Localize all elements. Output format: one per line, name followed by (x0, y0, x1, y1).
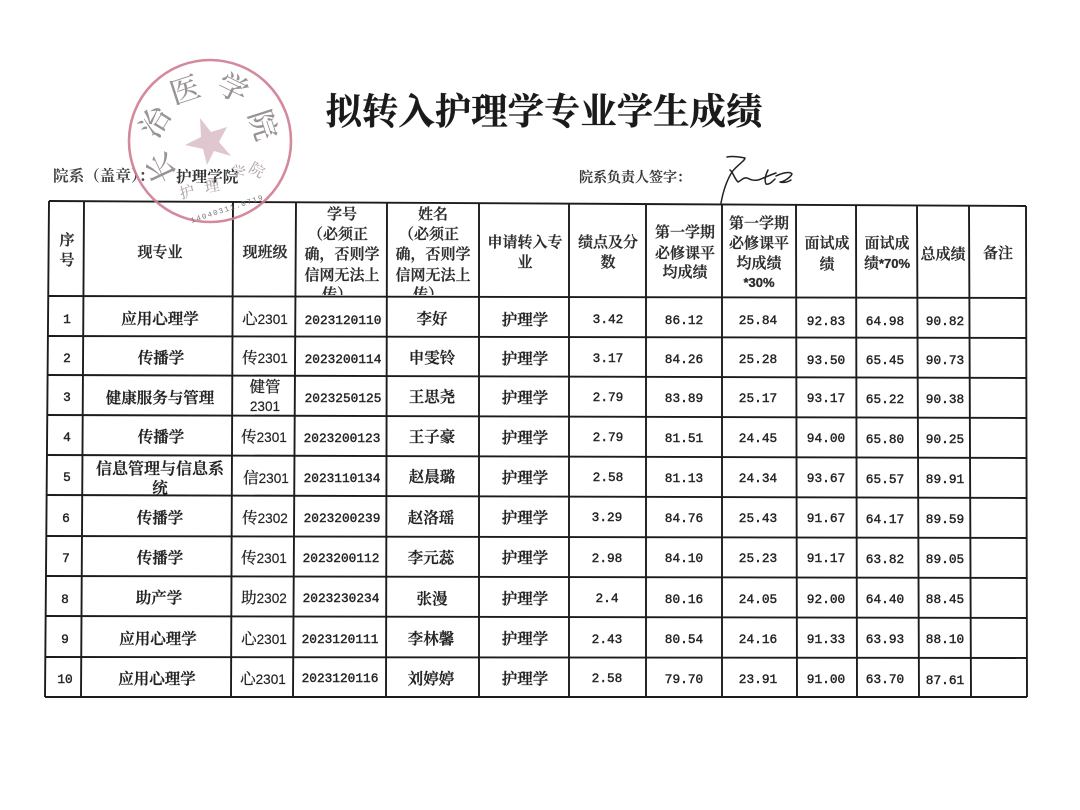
row 5: 89.91 (926, 472, 965, 487)
row 1: 90.82 (926, 314, 964, 329)
row 1: 64.98 (866, 314, 904, 329)
department label: 院系（盖章）： (53, 164, 154, 186)
table header row: 必修课平 (655, 242, 715, 263)
department label (53, 164, 239, 187)
table header row: 绩点及分 (578, 231, 638, 252)
row 3: 王思尧 (409, 385, 455, 407)
row 5: 2023110134 (304, 471, 381, 486)
row 3: 护理学 (502, 386, 549, 408)
table header row: 数 (600, 251, 616, 272)
row 9: 2.43 (592, 632, 622, 647)
row 5: 24.34 (739, 471, 778, 486)
row 9: 91.33 (807, 632, 845, 647)
row 5: 赵晨璐 (409, 465, 456, 487)
row 6: 64.17 (866, 512, 904, 527)
row 8: 92.00 (807, 592, 845, 607)
row 9 (61, 627, 964, 649)
table header row: （必须正 (399, 223, 459, 244)
row 5: 65.57 (866, 472, 904, 487)
row 4: 90.25 (926, 432, 964, 447)
row 10: 护理学 (502, 667, 549, 689)
row 2: 25.28 (739, 352, 777, 367)
row 7: 2.98 (592, 551, 622, 566)
row 4: 94.00 (807, 431, 845, 446)
signer label: 院系负责人签字： (579, 167, 691, 187)
row 5: 5 (63, 470, 71, 485)
row 10 (57, 667, 965, 689)
row 6: 25.43 (739, 511, 777, 526)
row 10: 87.61 (926, 673, 965, 688)
row 3: 65.22 (866, 392, 904, 407)
title: 拟转入护理学专业学生成绩 (326, 83, 763, 135)
table header row: （必须正 (308, 223, 368, 244)
row 9: 9 (61, 632, 69, 647)
row 2: 申雯铃 (409, 346, 456, 368)
row 6: 传播学 (137, 506, 184, 528)
row 7: 传2301 (241, 546, 287, 568)
row 10: 2.58 (592, 671, 622, 686)
row 10: 23.91 (739, 672, 778, 687)
row 1: 李好 (416, 307, 448, 329)
seal department characters (177, 157, 269, 204)
row 5: 护理学 (502, 466, 549, 488)
row 7: 25.23 (739, 551, 777, 566)
table header row: 面试成 (864, 232, 910, 253)
table header row: 绩*70% (864, 252, 910, 273)
row 9: 李林馨 (408, 627, 455, 649)
row 10: 应用心理学 (118, 667, 196, 689)
row 2: 65.45 (866, 353, 904, 368)
row 6: 6 (62, 511, 70, 526)
row 4: 24.45 (739, 431, 777, 446)
row 7: 护理学 (502, 546, 549, 568)
table header row: 均成绩 (662, 261, 708, 282)
row 2: 3.17 (593, 351, 623, 366)
seal ring (129, 60, 291, 222)
row 8 (61, 586, 964, 609)
row 5 (63, 456, 965, 498)
row 1: 1 (63, 312, 71, 327)
row 1 (63, 307, 964, 330)
row 7: 2023200112 (303, 551, 379, 566)
row 8: 24.05 (739, 592, 777, 607)
table grid (45, 201, 1027, 697)
row 9: 24.16 (739, 632, 777, 647)
row 3: 健康服务与管理 (106, 386, 215, 408)
seal department characters: 护 (177, 180, 197, 204)
row 6: 赵洛瑶 (408, 506, 454, 528)
row 3: 2.79 (593, 390, 623, 405)
row 3: 83.89 (665, 391, 703, 406)
handwritten signature (721, 157, 792, 203)
row 4: 2023200123 (304, 431, 380, 446)
row 7: 91.17 (807, 551, 845, 566)
row 8: 8 (61, 592, 69, 607)
row 7: 李元蕊 (408, 546, 456, 568)
table header row: 第一学期 (729, 212, 789, 233)
seal name characters: 院 (240, 103, 291, 145)
table header row: 备注 (983, 242, 1013, 263)
row 10: 63.70 (866, 672, 904, 687)
row 7: 7 (62, 551, 70, 566)
row 5: 信2301 (243, 466, 289, 488)
row 5: 81.13 (665, 471, 703, 486)
row 4: 传播学 (138, 425, 185, 447)
row 2: 传2301 (242, 346, 288, 368)
seal name characters: 医 (163, 62, 205, 113)
row 4: 护理学 (502, 426, 549, 448)
table header row: 号 (59, 249, 75, 270)
row 7 (62, 546, 964, 568)
row 8: 助产学 (136, 586, 183, 608)
row 2 (63, 346, 964, 369)
seal name characters (126, 59, 291, 192)
row 7: 63.82 (866, 552, 904, 567)
row 8: 张漫 (416, 587, 448, 609)
row 1: 25.84 (739, 313, 778, 328)
table header row: 均成绩 (736, 252, 782, 273)
row 2: 84.26 (665, 352, 703, 367)
row 9: 2023120111 (302, 632, 379, 647)
row 4: 4 (63, 430, 71, 445)
row 1: 2023120110 (305, 313, 381, 328)
row 9: 心2301 (241, 627, 287, 649)
row 1: 92.83 (807, 314, 845, 329)
row 4: 81.51 (665, 431, 704, 446)
row 9: 88.10 (926, 632, 964, 647)
row 8: 助2302 (241, 586, 287, 608)
seal name characters: 学 (211, 59, 257, 112)
row 8: 2.4 (595, 591, 619, 606)
row 3: 2023250125 (305, 391, 381, 406)
row 5: 统 (152, 476, 168, 498)
row 1: 86.12 (665, 313, 703, 328)
row 3: 健管 (249, 375, 281, 397)
table header row (60, 206, 1013, 295)
table header row: 绩 (819, 253, 835, 274)
seal name characters: 治 (126, 95, 181, 145)
row 4: 2.79 (593, 430, 623, 445)
table header row: 申请转入专 (487, 231, 563, 252)
row 6: 84.76 (665, 511, 703, 526)
row 3: 25.17 (739, 391, 777, 406)
row 6: 89.59 (926, 512, 964, 527)
row 5: 信息管理与信息系 (96, 456, 224, 479)
table header row: 学号 (327, 203, 357, 224)
table header row: 现专业 (137, 241, 183, 262)
row 8: 2023230234 (303, 591, 380, 606)
row 8: 护理学 (502, 587, 549, 609)
row 10: 刘婷婷 (408, 667, 455, 689)
row 2: 传播学 (138, 346, 185, 368)
row 7: 传播学 (137, 546, 184, 568)
row 2: 2 (63, 351, 71, 366)
row 1: 护理学 (502, 308, 549, 330)
row 7: 89.05 (926, 552, 964, 567)
row 10: 2023120116 (302, 671, 378, 686)
row 2: 90.73 (926, 353, 964, 368)
red seal (126, 59, 291, 226)
row 4 (63, 425, 964, 448)
row 4: 传2301 (241, 425, 287, 447)
table header row: *30% (743, 275, 775, 290)
department label: 护理学院 (176, 165, 239, 187)
row 10: 79.70 (665, 672, 703, 687)
table header row: 确，否则学 (304, 243, 380, 264)
row 2: 2023200114 (305, 352, 382, 367)
table header row: 面试成 (804, 232, 850, 253)
row 3: 93.17 (807, 391, 845, 406)
seal star (185, 118, 231, 165)
table (45, 201, 1027, 697)
table header row: 传） (413, 283, 443, 304)
row 2: 93.50 (807, 353, 845, 368)
row 3: 3 (63, 390, 71, 405)
row 6: 传2302 (242, 506, 288, 528)
row 4: 65.80 (866, 432, 904, 447)
table header row: 现班级 (242, 241, 288, 262)
table header row: 总成绩 (920, 243, 966, 264)
row 9: 护理学 (502, 627, 549, 649)
row 6: 3.29 (592, 510, 622, 525)
table header row: 业 (517, 251, 533, 272)
row 8: 64.40 (866, 592, 904, 607)
row 2: 护理学 (502, 347, 549, 369)
table header row: 信网无法上 (395, 264, 471, 285)
row 7: 84.10 (665, 551, 703, 566)
table header row: 姓名 (418, 203, 448, 224)
row 6 (62, 506, 964, 528)
seal department characters: 学 (228, 160, 248, 184)
row 8: 88.45 (926, 592, 964, 607)
row 4: 王子豪 (409, 425, 455, 447)
row 10: 10 (57, 672, 73, 687)
seal department characters: 理 (203, 174, 221, 197)
row 1: 应用心理学 (121, 307, 199, 329)
row 3 (63, 375, 964, 414)
row 6: 护理学 (502, 506, 549, 528)
row 8: 80.16 (665, 592, 703, 607)
row 3: 2301 (250, 399, 280, 414)
row 9: 应用心理学 (119, 627, 197, 649)
row 10: 心2301 (240, 667, 286, 689)
row 9: 80.54 (665, 632, 704, 647)
seal department characters: 院 (245, 157, 269, 183)
table header row: 信网无法上 (304, 264, 380, 285)
seal serial number: 14040311.0719 (190, 194, 265, 226)
row 9: 63.93 (866, 632, 904, 647)
table header row: 第一学期 (655, 221, 715, 242)
row 3: 90.38 (926, 392, 964, 407)
row 1: 心2301 (242, 307, 288, 329)
table header row: 序 (59, 229, 75, 250)
row 5: 93.67 (807, 471, 845, 486)
row 6: 2023200239 (304, 511, 380, 526)
row 10: 91.00 (807, 672, 845, 687)
row 6: 91.67 (807, 511, 845, 526)
seal name characters: 长 (132, 146, 185, 192)
table header row: 传） (322, 283, 352, 304)
table header row: 必修课平 (729, 232, 789, 253)
row 1: 3.42 (593, 312, 623, 327)
table header row: 确，否则学 (395, 243, 471, 264)
row 5: 2.58 (593, 470, 623, 485)
